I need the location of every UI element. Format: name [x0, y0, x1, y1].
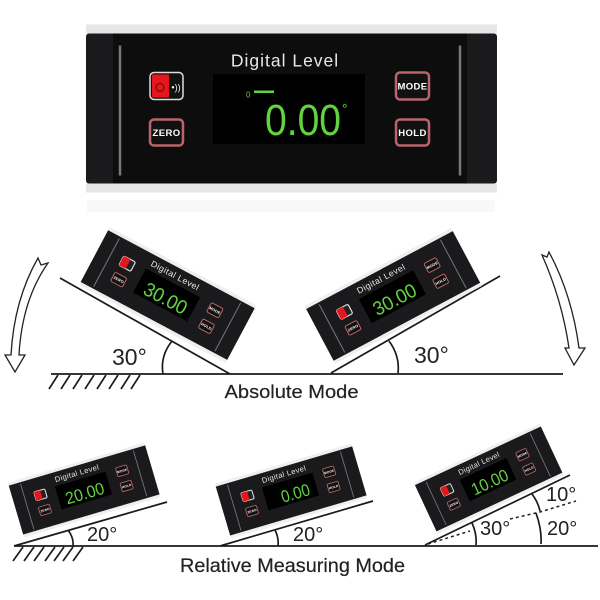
tilted device: 0.00 — [215, 443, 367, 538]
heading: relative measuring mode: Relative Measuring Mode — [180, 555, 405, 577]
tilted device: 0.00: Digital Level — [261, 463, 307, 485]
hold button — [396, 120, 429, 146]
tilted device: 0.00: ZERO — [247, 508, 258, 514]
tilted device left: 30.00: Digital Level — [149, 259, 201, 292]
tilted device: 10.00: 10.00 — [468, 466, 512, 499]
tilted device: 20.00: HOLD — [121, 483, 132, 489]
mode button: MODE — [397, 82, 428, 92]
relative mode diagram: ground and inclines — [13, 475, 598, 561]
power button — [150, 72, 183, 100]
label: 20 degrees first: 20° — [87, 524, 117, 546]
mode button — [396, 72, 429, 100]
lcd screen: ° — [342, 100, 348, 116]
tilted device left: 30.00 — [79, 227, 256, 363]
arrow: right curved down — [542, 252, 585, 365]
power button: •)) — [171, 82, 181, 92]
tilted device: 20.00: 20.00 — [63, 478, 107, 508]
tilted device: 0.00: MODE — [324, 468, 335, 475]
tilted device: 0.00: 0.00 — [278, 479, 312, 507]
lcd screen: 0 — [246, 90, 251, 100]
tilted device left: 30.00: MODE — [208, 306, 221, 315]
tilted device: 20.00: MODE — [117, 467, 128, 474]
tilted device: 10.00: Digital Level — [457, 450, 501, 477]
hold button: HOLD — [398, 128, 427, 139]
absolute mode diagram: ground and inclines — [49, 276, 563, 389]
lcd screen — [213, 74, 365, 145]
tilted device left: 30.00: ZERO — [113, 276, 124, 284]
tilted device right: 30.00: Digital Level — [355, 262, 407, 296]
label: 30 degrees right: 30° — [414, 342, 449, 368]
tilted device: 20.00: ZERO — [40, 507, 51, 513]
device title: Digital Level — [231, 50, 339, 70]
zero button — [150, 120, 183, 146]
zero button: ZERO — [152, 128, 180, 139]
main device: digital level — [86, 24, 497, 192]
label: 20 degrees second: 20° — [293, 524, 323, 546]
label: 10 degrees part: 10° — [546, 484, 576, 506]
arrow: left curved down — [5, 258, 48, 372]
tilted device: 20.00: Digital Level — [54, 462, 100, 484]
device reflection — [87, 200, 495, 212]
tilted device right: 30.00: ZERO — [347, 324, 359, 333]
tilted device left: 30.00: HOLD — [200, 322, 212, 331]
label: 30 degrees left: 30° — [112, 344, 147, 370]
tilted device right: 30.00: 30.00 — [369, 280, 421, 321]
heading: absolute mode: Absolute Mode — [224, 381, 358, 402]
tilted device right: 30.00 — [304, 228, 482, 364]
tilted device right: 30.00: HOLD — [435, 277, 447, 286]
tilted device left: 30.00: 30.00 — [140, 279, 191, 319]
tilted device: 0.00: HOLD — [328, 484, 339, 490]
label: 30 degrees total: 30° — [480, 518, 510, 540]
tilted device: 10.00 — [414, 424, 564, 534]
lcd screen: 0.00 — [265, 96, 341, 145]
tilted device: 20.00 — [8, 442, 160, 537]
tilted device right: 30.00: MODE — [426, 261, 439, 270]
tilted device: 10.00: ZERO — [449, 500, 459, 508]
tilted device: 10.00: HOLD — [524, 465, 535, 473]
tilted device: 10.00: MODE — [517, 451, 529, 459]
label: 20 degrees part: 20° — [547, 518, 577, 540]
